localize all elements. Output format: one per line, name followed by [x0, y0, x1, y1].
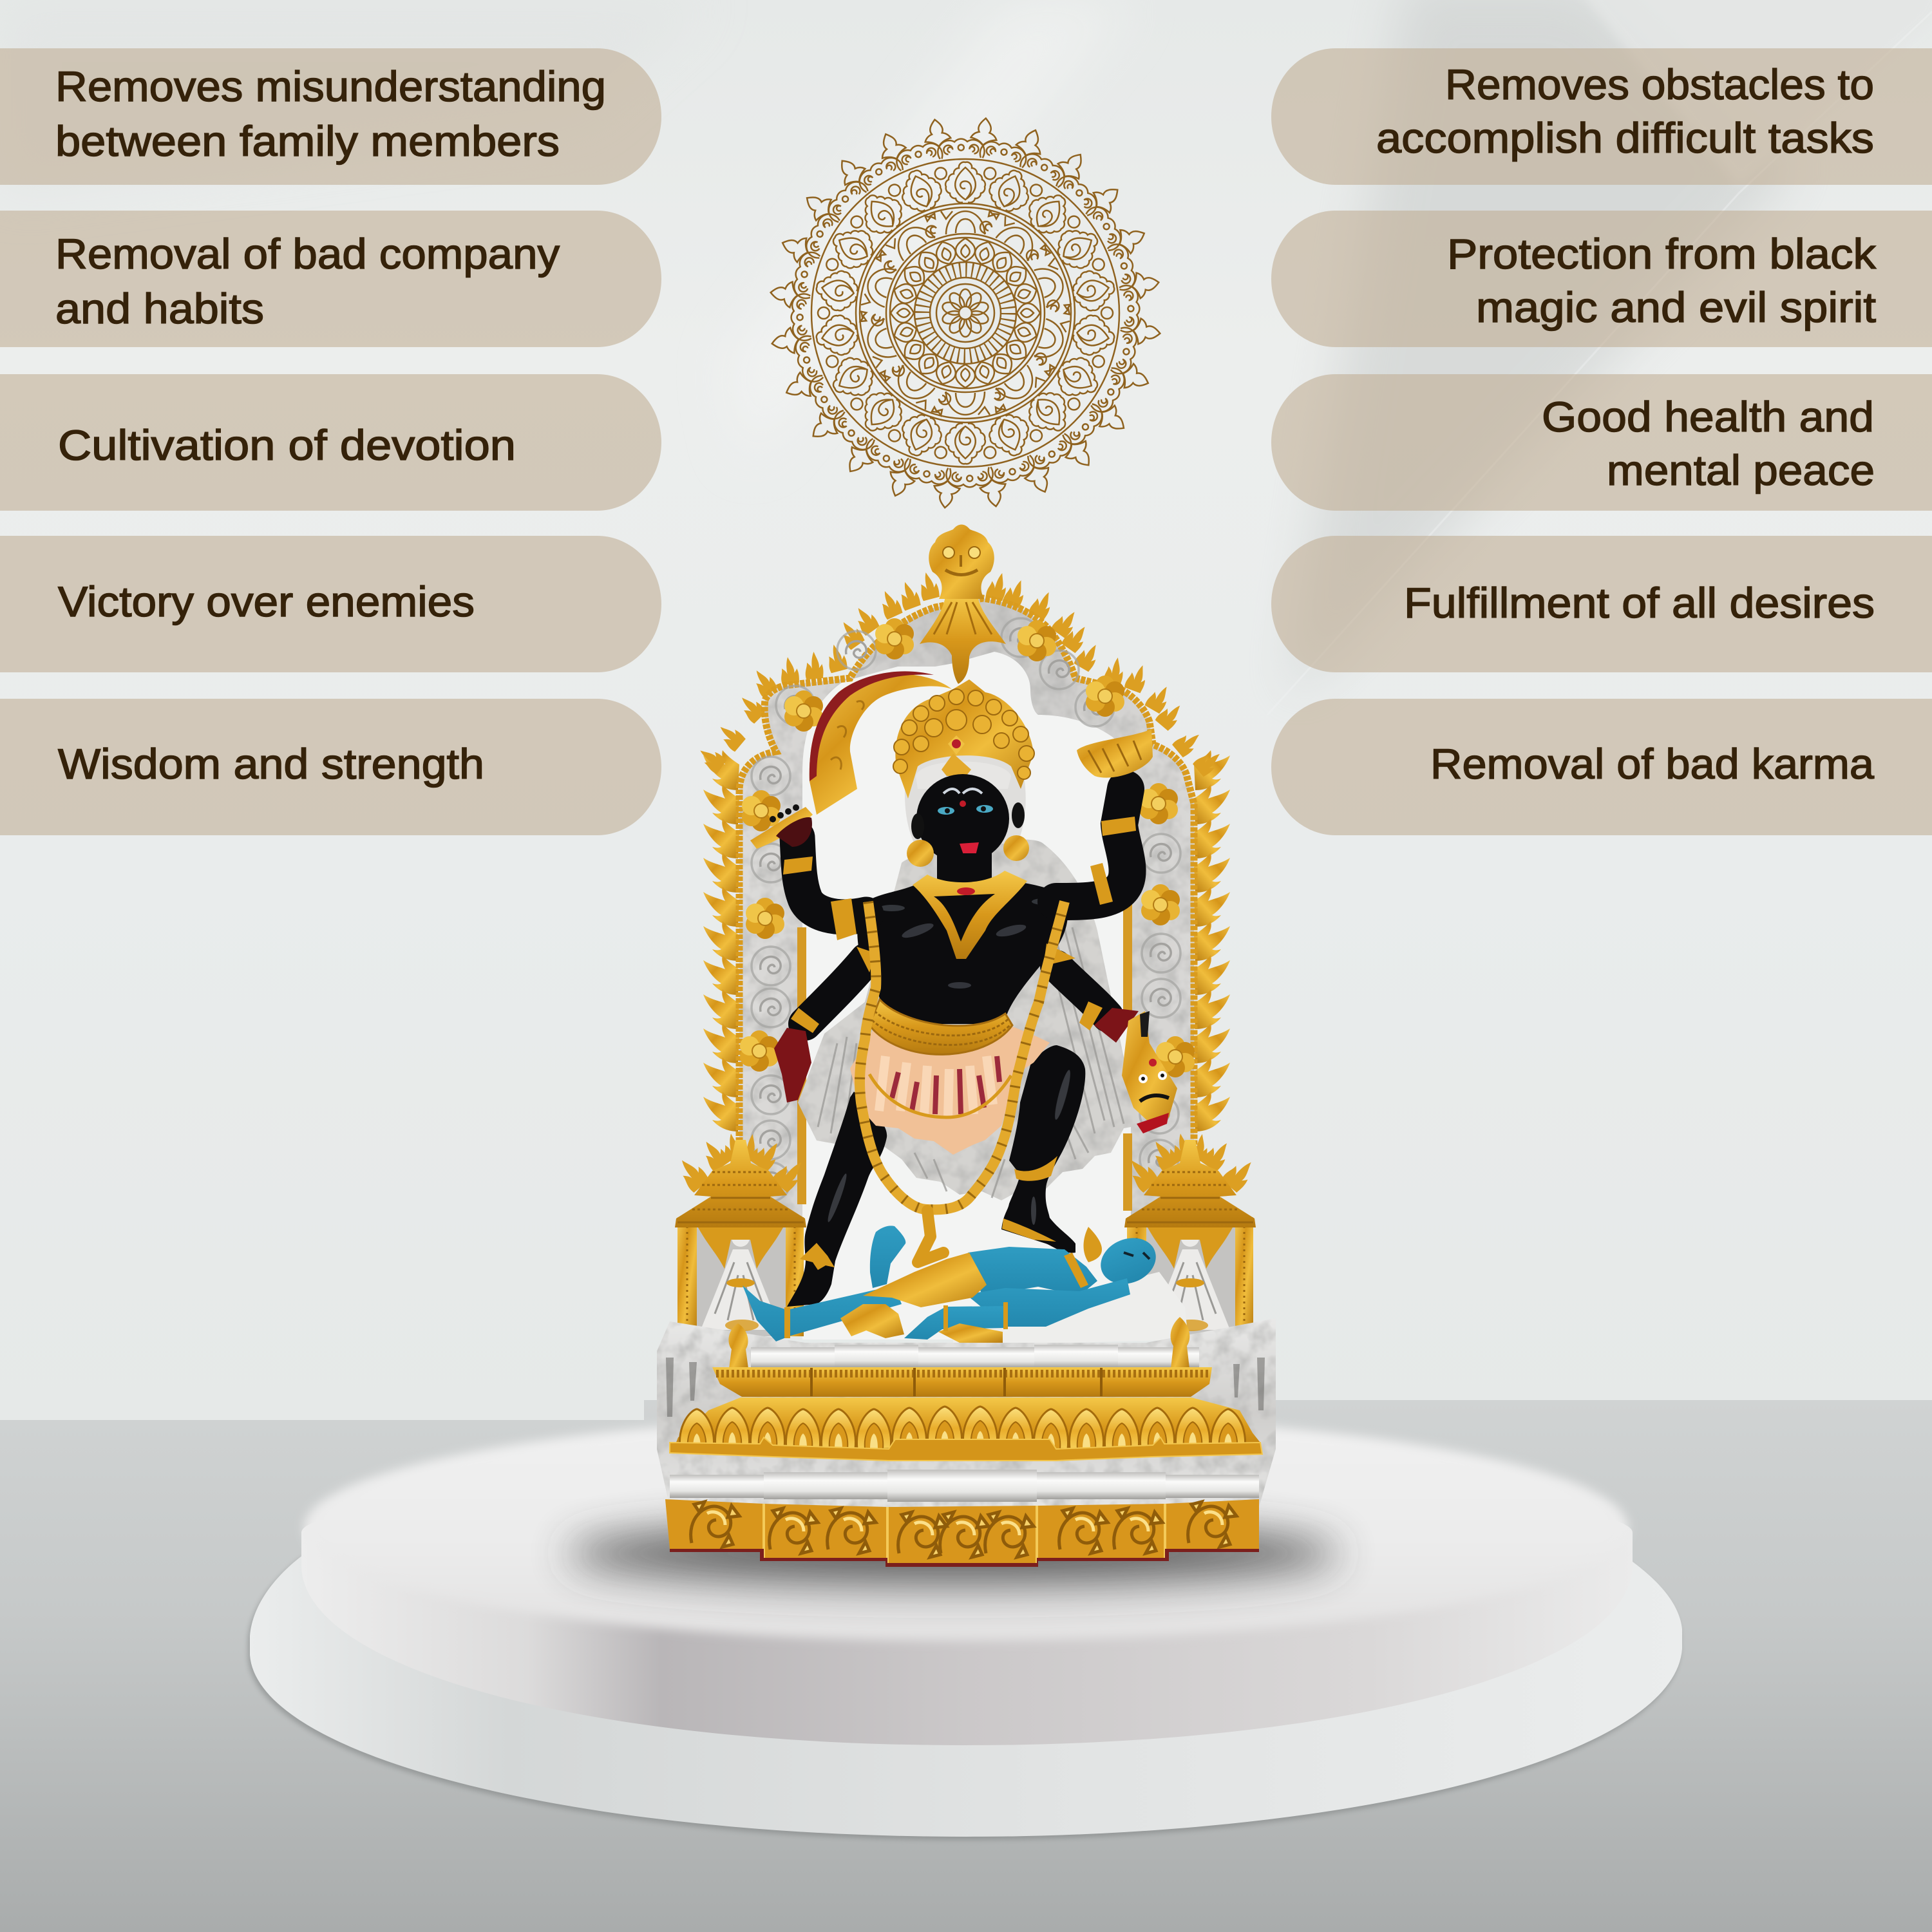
ear finial — [1083, 1227, 1102, 1262]
gold carved plinth — [665, 1499, 1259, 1563]
right temple — [1122, 1132, 1258, 1336]
crown beading — [893, 689, 1034, 779]
left benefits text: Wisdom and strength — [58, 740, 484, 788]
sickle handle and hand — [750, 804, 813, 849]
left benefits text: Victory over enemies — [58, 578, 475, 625]
left temple — [672, 1132, 809, 1336]
waist belt — [869, 999, 1012, 1054]
blue face marks — [1124, 1253, 1150, 1259]
crown gem — [948, 735, 965, 755]
right benefits text: Removes obstacles to — [1445, 61, 1874, 108]
skull bowl — [1077, 729, 1153, 778]
left benefits text: Cultivation of devotion — [58, 421, 516, 469]
sickle — [810, 671, 952, 815]
gold dhoti — [863, 1253, 987, 1307]
torso — [968, 1247, 1097, 1296]
right benefits text: Protection from black — [1447, 230, 1877, 278]
upper right arm — [1056, 789, 1128, 902]
left benefits text: Removal of bad company — [55, 230, 560, 278]
background wall — [0, 0, 1932, 1436]
forearm — [904, 1306, 1005, 1340]
peach skirt — [850, 1025, 1050, 1155]
frame swirls — [752, 618, 1180, 1201]
ears and earrings — [907, 802, 1029, 867]
silver head band — [916, 761, 1011, 789]
floor contact shadow — [248, 1558, 1680, 1840]
left benefit pills — [0, 48, 661, 835]
right bent leg — [1001, 1045, 1085, 1253]
base glass reflections — [666, 1358, 1265, 1417]
gold inner strips — [797, 902, 1132, 1211]
gold forehead peak — [942, 753, 971, 776]
extended leg — [743, 1285, 902, 1341]
side flames — [703, 750, 1230, 1132]
raised thigh — [870, 1226, 905, 1288]
right leg anklets — [1002, 1156, 1057, 1242]
lower silver steps — [670, 1470, 1259, 1502]
podium top face — [304, 1414, 1628, 1641]
crown — [893, 679, 1034, 799]
wall light and shadow folds — [0, 0, 1932, 715]
torso highlights — [879, 898, 1055, 989]
gold garland chain — [860, 902, 1065, 1262]
upper silver base tier — [657, 1318, 1276, 1507]
lower right red hand — [1094, 1008, 1139, 1043]
gold bead edge — [739, 598, 1194, 1159]
lower left arm — [805, 960, 866, 1024]
silver drape below figure — [953, 1272, 1188, 1346]
left ankle ornament — [800, 1243, 835, 1270]
face — [916, 774, 1009, 863]
gold lotus tier — [673, 1397, 1260, 1457]
right benefits text: mental peace — [1607, 446, 1875, 494]
left benefits text: and habits — [55, 285, 264, 332]
right benefits text: Removal of bad karma — [1430, 740, 1874, 788]
gold lower arm ornament — [938, 1323, 1003, 1343]
opening backdrop — [802, 652, 1131, 1340]
belt lines — [872, 1011, 1011, 1045]
arm ornaments — [783, 817, 1136, 1033]
right benefit pills — [1271, 48, 1932, 835]
Kali statue — [657, 524, 1276, 1567]
floor — [0, 1400, 1932, 1932]
right benefits text: magic and evil spirit — [1476, 283, 1876, 331]
central silver platform — [751, 1345, 1199, 1368]
left standing leg — [787, 1092, 887, 1307]
severed head — [1122, 1011, 1177, 1133]
mandala ornament — [770, 117, 1161, 509]
facial features — [938, 789, 993, 862]
blue figure Shiva — [743, 1226, 1163, 1343]
right benefits text — [1376, 61, 1877, 788]
lotus petals — [679, 1406, 1245, 1449]
shadow below statue — [567, 1522, 1340, 1584]
podium — [248, 1414, 1682, 1840]
cornice bead row — [716, 1370, 1209, 1378]
podium upper disc — [301, 1484, 1633, 1745]
upper left arm — [797, 837, 866, 917]
leg highlights — [826, 1069, 1073, 1225]
upper arm — [966, 1278, 1130, 1327]
base finials — [728, 1317, 1189, 1368]
gold rosettes — [740, 618, 1195, 1077]
arch flames — [694, 571, 1225, 777]
right benefits text: accomplish difficult tasks — [1376, 114, 1874, 162]
red felt — [670, 1549, 1259, 1567]
neck — [937, 853, 992, 886]
left benefits text: between family members — [55, 117, 560, 165]
silver arch frame — [739, 598, 1194, 1224]
skirt lighter strips — [879, 1056, 993, 1117]
cornice pillars — [811, 1368, 1101, 1396]
gold bands — [784, 1253, 1088, 1338]
head — [1094, 1230, 1163, 1292]
necklace — [913, 871, 1027, 959]
crown gem centre — [952, 739, 961, 748]
podium lower disc — [250, 1555, 1682, 1837]
right benefits text: Fulfillment of all desires — [1404, 579, 1875, 627]
left benefits text: Removes misunderstanding — [55, 62, 606, 110]
gold cornice tier — [712, 1367, 1212, 1397]
lotus rim — [670, 1437, 1262, 1461]
torso — [857, 879, 1068, 1024]
left benefits text — [55, 62, 606, 788]
silver hair fan — [798, 839, 1138, 1200]
necklace gem — [957, 887, 975, 895]
hair strands — [818, 921, 1124, 1198]
skirt red folds — [892, 1056, 999, 1114]
skirt thin chain — [869, 1074, 1011, 1117]
gold trident — [840, 1304, 904, 1338]
lower left red hand — [774, 1028, 811, 1103]
plinth panel edges — [764, 1504, 1165, 1563]
hair behind head — [905, 741, 1026, 844]
right benefits text: Good health and — [1542, 393, 1874, 440]
lower right arm — [1056, 966, 1108, 1016]
crest with kirtimukha face and fan — [920, 524, 1006, 684]
plinth scrolls — [691, 1502, 1236, 1557]
